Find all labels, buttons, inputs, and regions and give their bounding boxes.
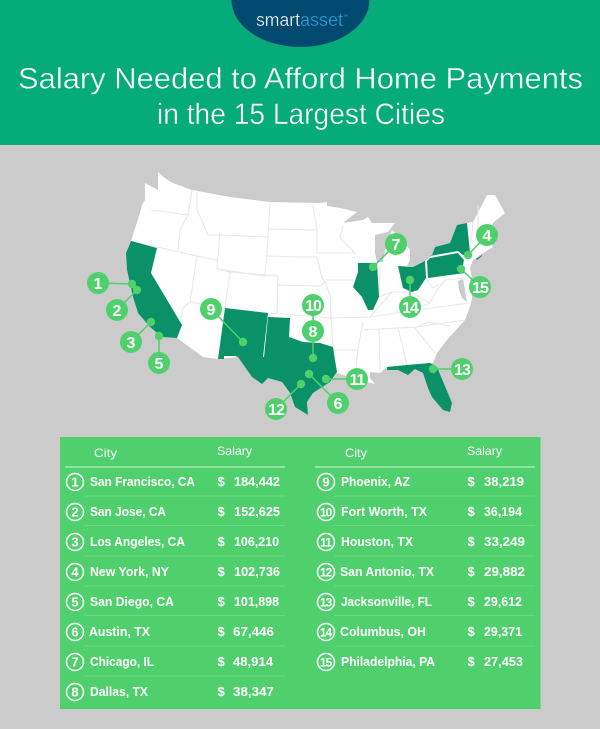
map marker numbers: 3 — [127, 335, 136, 352]
salary table panel — [60, 437, 540, 709]
highlighted states — [126, 223, 482, 415]
left column: Dallas, TX — [90, 684, 148, 699]
map marker numbers: 14 — [402, 300, 419, 317]
left column: 67,446 — [233, 624, 274, 639]
map marker numbers: 15 — [472, 280, 489, 297]
logo badge — [232, 0, 370, 47]
left column: $ — [218, 534, 226, 549]
right column: $ — [468, 594, 476, 609]
right column: 15 — [320, 656, 332, 670]
map marker numbers: 13 — [454, 362, 471, 379]
left column: $ — [218, 594, 226, 609]
right column: 29,612 — [484, 594, 522, 609]
left column: San Jose, CA — [90, 504, 167, 519]
right column: 29,371 — [484, 624, 522, 639]
left column: 7 — [71, 654, 79, 670]
right column: 14 — [320, 626, 332, 640]
left column: 38,347 — [233, 684, 274, 699]
left column — [66, 444, 280, 700]
state: New Mexico — [218, 308, 268, 359]
left column: $ — [218, 624, 226, 639]
map marker numbers: 10 — [305, 298, 322, 315]
left column: 4 — [71, 564, 79, 580]
left column: $ — [218, 654, 226, 669]
left column: 6 — [71, 624, 79, 640]
left column: 184,442 — [234, 474, 280, 489]
left column: Los Angeles, CA — [90, 534, 186, 549]
header banner — [0, 0, 600, 145]
left column: $ — [218, 474, 226, 489]
map marker lines — [98, 235, 487, 409]
right column: $ — [468, 624, 476, 639]
logo badge: smart — [256, 10, 300, 30]
right column: Columbus, OH — [340, 624, 426, 639]
map marker numbers: 9 — [207, 302, 216, 319]
right column: 13 — [320, 596, 332, 610]
left column: City — [94, 446, 117, 460]
state: California — [126, 241, 182, 338]
right column: Fort Worth, TX — [341, 504, 427, 519]
state: Florida — [387, 363, 452, 412]
left column: 2 — [71, 504, 79, 520]
left column: San Diego, CA — [90, 594, 175, 609]
left column: 106,210 — [234, 534, 279, 549]
left column: 8 — [71, 684, 79, 700]
left column: 5 — [71, 594, 79, 610]
right column: Houston, TX — [341, 534, 413, 549]
right column: $ — [468, 564, 476, 579]
map marker numbers: 6 — [334, 396, 343, 413]
state borders — [131, 190, 492, 372]
left column: Salary — [217, 444, 252, 458]
right column: City — [345, 446, 367, 460]
map marker numbers: 12 — [268, 402, 285, 419]
right column: 36,194 — [484, 504, 523, 519]
right column — [318, 444, 525, 670]
right column: $ — [468, 474, 476, 489]
right column: Philadelphia, PA — [341, 654, 436, 669]
title: in the 15 Largest Cities — [157, 98, 445, 131]
right column: 29,882 — [484, 564, 525, 579]
state: Long Island — [476, 255, 482, 260]
logo badge: asset — [300, 10, 343, 30]
right column: 33,249 — [484, 534, 525, 549]
map marker numbers: 7 — [392, 237, 401, 254]
left column: 152,625 — [234, 504, 280, 519]
left column: New York, NY — [90, 564, 169, 579]
left column: Austin, TX — [89, 624, 150, 639]
title — [18, 62, 583, 131]
left column: $ — [218, 684, 226, 699]
right column: 10 — [320, 506, 332, 520]
map markers — [87, 224, 498, 420]
right column: San Antonio, TX — [340, 564, 434, 579]
map base — [126, 172, 505, 415]
chesapeake bay — [458, 279, 467, 302]
logo badge: ™ — [343, 14, 348, 20]
left column: 1 — [71, 474, 79, 490]
left column: San Francisco, CA — [90, 474, 196, 489]
map marker numbers: 1 — [94, 276, 103, 293]
map marker numbers: 11 — [350, 372, 366, 389]
left column: $ — [218, 504, 226, 519]
right column: Jacksonville, FL — [341, 594, 432, 609]
left column: Chicago, IL — [90, 654, 154, 669]
map marker numbers — [94, 228, 492, 419]
right column: $ — [468, 654, 476, 669]
left column: $ — [218, 564, 226, 579]
right column: Phoenix, AZ — [341, 474, 410, 489]
map marker numbers: 8 — [309, 324, 318, 341]
title: Salary Needed to Afford Home Payments — [18, 62, 583, 96]
right column: 12 — [320, 566, 332, 580]
right column: $ — [468, 504, 476, 519]
left column: 101,898 — [234, 594, 279, 609]
map marker numbers: 4 — [483, 228, 492, 245]
right column: 11 — [320, 536, 332, 550]
map marker numbers: 2 — [113, 303, 122, 320]
left column: 102,736 — [234, 564, 280, 579]
right column: 27,453 — [484, 654, 523, 669]
US map — [87, 172, 505, 420]
left column: 48,914 — [233, 654, 274, 669]
map marker numbers: 5 — [155, 356, 164, 373]
state: Texas — [238, 317, 337, 415]
table dividers — [65, 467, 535, 676]
right column: $ — [468, 534, 476, 549]
right column: 9 — [322, 474, 330, 490]
right column: Salary — [467, 444, 502, 458]
left column: 3 — [71, 534, 79, 550]
state: Ohio — [398, 261, 426, 292]
state: Pennsylvania — [427, 253, 465, 278]
right column: 38,219 — [484, 474, 524, 489]
state: New York — [430, 223, 470, 258]
state: Illinois — [353, 263, 379, 310]
